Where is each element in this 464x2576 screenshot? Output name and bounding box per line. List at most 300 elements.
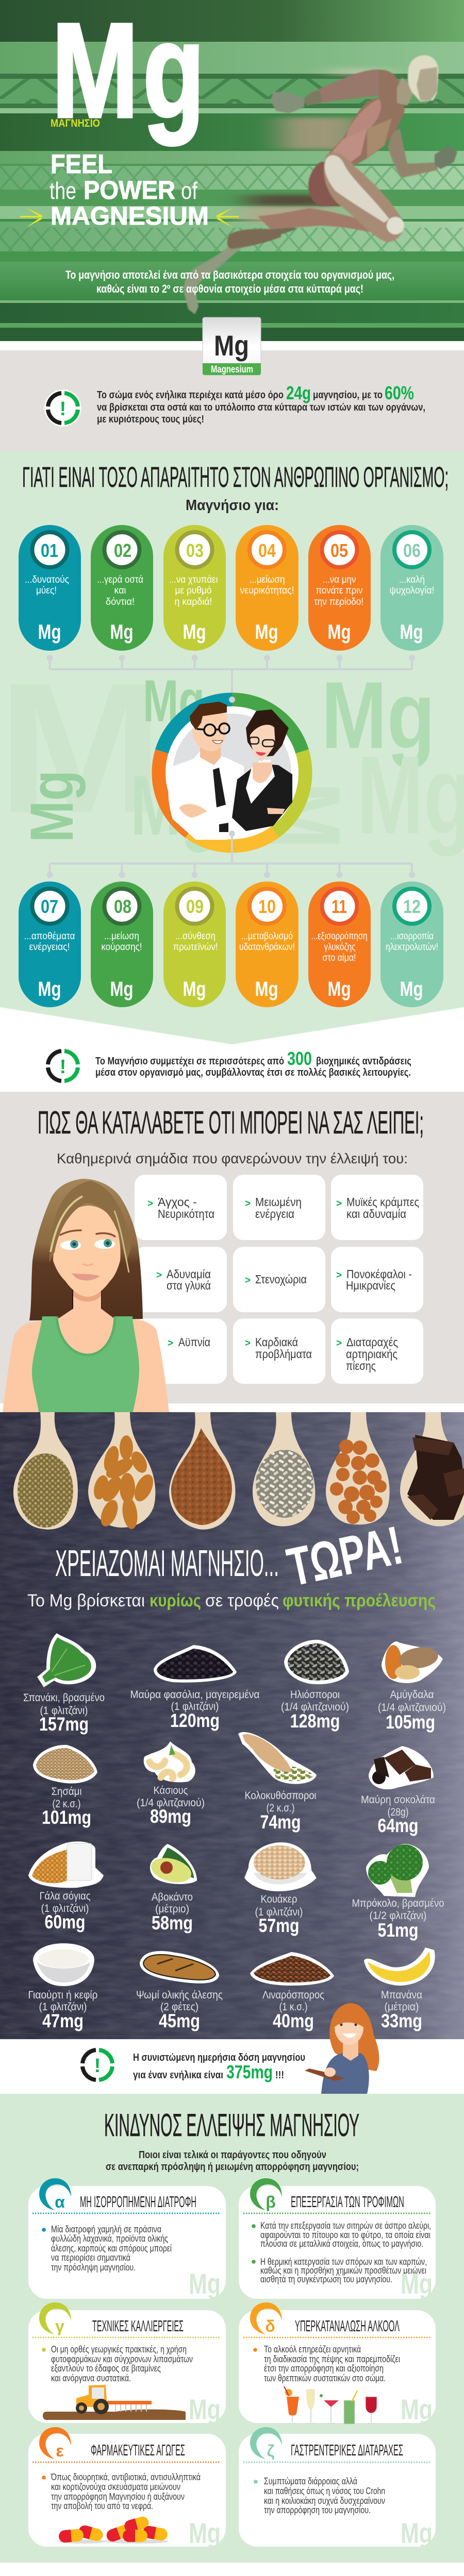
subheading: plant origin: Το Mg βρίσκεται: [27, 1591, 145, 1611]
card β: food processing: Mg: [401, 2267, 433, 2300]
food: cashews: [137, 1741, 205, 1827]
tank top: [32, 1316, 139, 1412]
food: yogurt: [28, 1943, 98, 2031]
illustration: worried woman: [3, 1179, 169, 1412]
food grid: [23, 1633, 446, 2031]
food: avocado: 58mg: [152, 1912, 193, 1934]
pill 07: ...αποθέματα: [24, 931, 75, 942]
card γ: farming techniques: [28, 2302, 226, 2426]
food: cashews: Κάσιους: [154, 1785, 188, 1797]
card ζ: gastrointestinal: και η κοιλιοκάκη συχνά δυσχεραίνουν: [264, 2495, 385, 2506]
background Mg watermarks: Mg: [0, 645, 286, 853]
mouth and nose: [71, 1273, 100, 1280]
pill 03: [163, 525, 226, 651]
pill 12: 12: [403, 896, 421, 917]
subheading: Καθημερινά σημάδια που φανερώνουν την έλλειψή του:: [57, 1150, 408, 1166]
food: banana: Μπανάνα: [381, 1989, 422, 2001]
pill 11: στο αίμα!: [323, 953, 356, 963]
card α: unbalanced diet: να περιορίσει σημαντικά: [51, 2252, 130, 2263]
food: sesame: Σησάμι: [52, 1786, 82, 1798]
food: pumpkin seeds with scoop: 74mg: [260, 1811, 301, 1833]
hero panel: [0, 0, 464, 341]
food: avocado: [148, 1844, 197, 1934]
pill 10: [236, 882, 299, 1007]
card: sweet cravings: >: [156, 1270, 162, 1281]
card: anxiety: [135, 1175, 227, 1240]
card: reduced energy: ενέργεια: [255, 1207, 294, 1221]
card: blood pressure: Διαταραχές: [346, 1335, 398, 1349]
card γ: farming techniques: φυτοφαρμάκων και σύγχρονων λιπασμάτων: [51, 2353, 193, 2364]
icon: cocktails: [284, 2386, 377, 2424]
alert text: [133, 2052, 305, 2082]
subheading: plant origin: σε τροφές: [205, 1591, 279, 1611]
pill 05: Mg: [328, 621, 351, 643]
brows: [60, 1230, 115, 1236]
spark rays: [20, 208, 239, 228]
alert: 24g in body: [44, 382, 425, 427]
magnesium caption: ΜΑΓΝΗΣΙΟ: [51, 117, 100, 129]
hero intro text: καθώς είναι το 2º σε αφθονία στοιχείο μέσα στα κύτταρά μας!: [96, 282, 363, 295]
food: oats bowl: [244, 1842, 317, 1936]
card γ: farming techniques: Mg: [189, 2393, 221, 2426]
pill 06: 06: [403, 540, 421, 561]
food: soy milk: (1 φλιτζάνι): [41, 1903, 89, 1914]
man shirt: [168, 751, 247, 840]
food: black beans: Μαύρα φασόλια, μαγειρεμένα: [130, 1689, 260, 1701]
card α: unbalanced diet: [28, 2178, 226, 2300]
Mg Magnesium badge: Mg: [214, 329, 249, 362]
card: heart problems: Καρδιακά: [255, 1335, 298, 1349]
pill 03: 03: [186, 540, 204, 561]
pill 02: Mg: [110, 621, 133, 643]
food: sesame: 101mg: [42, 1807, 91, 1828]
pill 12: [380, 882, 443, 1007]
pill 09: [163, 882, 226, 1007]
card: cramps: >: [336, 1198, 342, 1209]
pill 11: 11: [332, 896, 347, 917]
card: reduced energy: Μειωμένη: [255, 1195, 302, 1209]
pill 12: ηλεκτρολυτών!: [386, 942, 438, 953]
card: headaches: [331, 1247, 423, 1312]
hero background bands: [0, 0, 464, 341]
pill 05: ...να μην: [323, 574, 356, 585]
food: wholegrain bread: Ψωμί ολικής άλεσης: [136, 1989, 223, 2001]
food: cashews: (1/4 φλιτζανιού): [137, 1797, 205, 1809]
card: heart problems: >: [245, 1338, 251, 1349]
food: flaxseed: Λιναρόσπορος: [262, 1989, 324, 2001]
subheading: Ποιοι είναι τελικά οι παράγοντες που οδηγούν: [139, 2149, 326, 2161]
food: wholegrain bread: 45mg: [159, 2010, 200, 2031]
alert text: Η συνιστώμενη ημερήσια δόση μαγνησίου: [133, 2052, 305, 2063]
food: sunflower seeds: (1/4 φλιτζανιού): [281, 1701, 349, 1713]
pill 08: 08: [114, 896, 131, 917]
food: pumpkin seeds with scoop: (2 κ.σ.): [266, 1802, 295, 1814]
food: avocado: Αβοκάντο: [152, 1891, 193, 1903]
food: yogurt: 47mg: [42, 2010, 84, 2031]
connector lines top: [46, 655, 415, 700]
food: almonds: Αμύγδαλα: [390, 1689, 434, 1701]
spoon: sunflower kernels: [253, 1412, 315, 1527]
card ζ: gastrointestinal: την απορρόφηση του μαγνησίου.: [264, 2504, 371, 2515]
card ζ: gastrointestinal: και παθήσεις όπως η νόσος του Crohn: [264, 2485, 385, 2496]
card: sweet cravings: στα γλυκά: [167, 1279, 211, 1292]
background Mg watermarks: Mg: [18, 770, 86, 842]
alert text: 24g: [286, 382, 311, 403]
food: soy milk: [28, 1841, 104, 1933]
card: sweet cravings: [135, 1247, 227, 1312]
food: oats bowl: 57mg: [259, 1915, 299, 1936]
pill 04: Mg: [255, 621, 278, 643]
food: dark chocolate: [361, 1746, 435, 1836]
pill 02: δόντια!: [106, 597, 135, 607]
card α: unbalanced diet: Μία διατροφή χαμηλή σε πράσινα: [51, 2224, 161, 2234]
badge γ: [39, 2302, 71, 2335]
card: anxiety: Νευρικότητα: [158, 1207, 214, 1221]
card: blood pressure: αρτηριακής: [346, 1347, 397, 1361]
card: reduced energy: [233, 1175, 325, 1240]
spoon: almonds: [88, 1412, 157, 1530]
alert text: Το σώμα ενός ενήλικα περιέχει κατά μέσο όρο: [97, 389, 284, 401]
card ζ: gastrointestinal: [239, 2427, 436, 2549]
pill 03: ...να χτυπάει: [169, 574, 218, 585]
pill 11: [308, 882, 371, 1007]
top and bottom nodes: [229, 697, 235, 837]
background Mg watermarks: [0, 645, 464, 857]
pill 09: Mg: [183, 978, 206, 1001]
alert text: 300: [287, 1048, 312, 1069]
card: heart problems: [233, 1318, 325, 1384]
food: broccoli: (1/2 φλιτζάνι): [369, 1910, 427, 1922]
pill 05: την περίοδο!: [314, 597, 363, 607]
pill 10: ...μεταβολισμό: [241, 931, 293, 942]
pill 11: ...εξισορρόπηση: [311, 931, 367, 942]
card δ: alcohol: [239, 2302, 436, 2426]
pill 09: 09: [186, 896, 204, 917]
badge α: α: [55, 2193, 65, 2211]
badge ζ: [250, 2427, 282, 2460]
badge δ: [250, 2302, 282, 2335]
food: sunflower seeds: [281, 1640, 349, 1732]
card: sweet cravings: Αδυναμία: [167, 1267, 211, 1281]
pill 06: Mg: [400, 621, 423, 643]
badge β: β: [266, 2193, 276, 2211]
badge β: [250, 2178, 282, 2211]
background Mg watermarks: Mg: [321, 663, 435, 769]
food: pumpkin seeds with scoop: Κολοκυθόσποροι: [244, 1790, 317, 1802]
card: distress: [233, 1247, 325, 1312]
alert text: [97, 382, 425, 425]
pill 04: [236, 525, 299, 651]
card: insomnia: >: [168, 1338, 173, 1349]
card: insomnia: [135, 1318, 227, 1384]
icon: exclamation ring: [44, 1047, 81, 1084]
card: headaches: Πονοκέφαλοι -: [346, 1267, 412, 1281]
background Mg watermarks: Mg: [143, 668, 205, 734]
pill 09: ...σύνθεση: [175, 931, 216, 942]
pills row 2: [19, 882, 443, 1007]
pill 08: ...μείωση: [104, 931, 139, 942]
pill 05: 05: [330, 540, 348, 561]
pill 02: και: [114, 585, 126, 596]
card: heart problems: προβλήματα: [255, 1347, 312, 1361]
pill 10: υδατανθράκων!: [239, 942, 295, 953]
headline: of: [181, 177, 197, 204]
food: cashews: 89mg: [150, 1806, 191, 1827]
icon: exclamation ring: !: [60, 398, 66, 420]
food: spinach: [23, 1633, 105, 1735]
card: distress: Στενοχώρια: [255, 1273, 307, 1286]
card: blood pressure: >: [336, 1338, 342, 1349]
pill 08: κούρασης!: [101, 942, 142, 953]
food: banana: (μέτρια): [385, 2001, 419, 2013]
coloured ring: [159, 700, 305, 846]
central ring with couple: [159, 697, 305, 846]
food: black beans: 120mg: [170, 1710, 220, 1731]
icon: exclamation ring: !: [60, 1056, 66, 1078]
badge α: [39, 2178, 71, 2211]
pill 03: η καρδιά!: [174, 597, 212, 607]
pill 11: Mg: [328, 978, 351, 1001]
pill 03: Mg: [183, 621, 206, 643]
badge γ: γ: [55, 2317, 64, 2335]
food: oats bowl: (1 φλιτζάνι): [255, 1906, 303, 1918]
food: wholegrain bread: (2 φέτες): [160, 2001, 198, 2013]
card: headaches: Ημικρανίες: [346, 1279, 395, 1292]
food: pumpkin seeds with scoop: [238, 1732, 317, 1833]
pill 08: Mg: [110, 978, 133, 1001]
food: dark chocolate: (28g): [388, 1806, 408, 1818]
card α: unbalanced diet: άλεσης, καρπούς και σπόρους μπορεί: [51, 2243, 172, 2253]
pill 06: [380, 525, 443, 651]
card ε: medication: την απορρόφηση Μαγνησίου ή αυξάνουν: [51, 2491, 185, 2502]
woman jacket: [232, 764, 292, 831]
badge ζ: ζ: [267, 2442, 275, 2460]
subheading: σε ανεπαρκή πρόσληψη ή μειωμένη απορρόφηση μαγνησίου;: [106, 2161, 359, 2173]
pill 04: ...μείωση: [250, 574, 285, 585]
runner anatomy figure: [183, 55, 457, 314]
pill 01: Mg: [38, 621, 61, 643]
illustration: man and woman: [168, 702, 292, 840]
card: blood pressure: [331, 1318, 423, 1384]
food: flaxseed: [250, 1952, 334, 2031]
food section background: [0, 1412, 464, 2039]
pill 07: 07: [41, 896, 58, 917]
shoulders and arms: [3, 1285, 169, 1412]
card δ: alcohol: Το αλκοόλ επηρεάζει αρνητικά: [264, 2344, 361, 2354]
alert text: [95, 1048, 411, 1078]
food: almonds: 105mg: [386, 1711, 435, 1733]
card ε: medication: την αποβολή του από τα νεφρά.: [51, 2500, 153, 2511]
card: blood pressure: πίεσης: [346, 1359, 376, 1372]
food: spinach: 157mg: [39, 1714, 89, 1735]
alert text: μαγνησίου, με το: [313, 389, 383, 401]
food: black beans: (1 φλιτζάνι): [171, 1701, 219, 1713]
food: flaxseed: 40mg: [273, 2010, 314, 2031]
card γ: farming techniques: ΤΕΧΝΙΚΕΣ ΚΑΛΛΙΕΡΓΕΙΕΣ: [92, 2317, 184, 2335]
food: banana: [364, 1947, 435, 2031]
pill 11: γλυκόζης: [324, 942, 356, 953]
pill 05: [308, 525, 371, 651]
headline: POWER: [84, 176, 175, 205]
card α: unbalanced diet: Mg: [189, 2267, 221, 2300]
alert: 300 reactions: [44, 1047, 411, 1084]
pill 05: πονάτε πριν: [316, 585, 363, 596]
card ε: medication: [28, 2427, 226, 2549]
food: banana: 33mg: [381, 2010, 422, 2031]
woman hair: [246, 709, 289, 757]
alert text: με κυριότερους τους μύες!: [97, 414, 204, 425]
food: broccoli: Μπρόκολο, βρασμένο: [352, 1897, 444, 1909]
pill 12: ...ισορροπία: [390, 931, 434, 942]
card γ: farming techniques: εξαντλούν το έδαφος σε βιταμίνες: [51, 2363, 161, 2374]
spoon: chocolate: [400, 1412, 464, 1527]
alert text: βιοχημικές αντιδράσεις: [316, 1056, 411, 1067]
badge ε: [39, 2427, 71, 2460]
subheading: plant origin: φυτικής προέλευσης: [283, 1591, 436, 1611]
hero intro text: [65, 268, 394, 295]
food: sesame: (2 κ.σ.): [53, 1798, 80, 1810]
card δ: alcohol: Mg: [401, 2393, 433, 2426]
food: broccoli: 51mg: [377, 1920, 419, 1941]
eyes: [60, 1239, 115, 1250]
food: spinach: Σπανάκι, βρασμένο: [23, 1692, 105, 1704]
icon: capsules: [58, 2515, 169, 2544]
pill 08: [91, 882, 153, 1007]
card α: unbalanced diet: ΜΗ ΙΣΟΡΡΟΠΗΜΕΝΗ ΔΙΑΤΡΟΦΗ: [80, 2193, 196, 2211]
pill 09: πρωτεϊνών!: [173, 942, 218, 953]
pill 01: μύες!: [36, 585, 57, 596]
subheading: plant origin: [27, 1591, 436, 1611]
card ζ: gastrointestinal: Mg: [401, 2517, 433, 2549]
food: broccoli: [352, 1844, 444, 1941]
spoon: buckwheat: [13, 1412, 78, 1530]
pill 07: [19, 882, 81, 1007]
headline: MAGNESIUM: [51, 201, 209, 230]
card: insomnia: Αϋπνία: [178, 1335, 210, 1349]
spoon: hazelnuts: [326, 1412, 390, 1524]
alert: recommended daily dose: [79, 2046, 305, 2083]
pill 07: Mg: [38, 978, 61, 1001]
pill 02: ...γερά οστά: [97, 574, 143, 585]
card β: food processing: αισθητά τη συγκέντρωση του μαγνησίου.: [260, 2274, 392, 2284]
food: wholegrain bread: [136, 1951, 223, 2031]
illustration: woman with notebook: [305, 2003, 379, 2094]
pill 02: [91, 525, 153, 651]
wooden spoons with foods: [13, 1412, 464, 1530]
badge δ: δ: [265, 2317, 275, 2335]
card ε: medication: και κορτιζονούχα σκευάσματα μειώνουν: [51, 2481, 180, 2492]
heading: I need magnesium now: ΤΩΡΑ!: [282, 1515, 408, 1598]
card: cramps: και αδυναμία: [346, 1207, 406, 1221]
pill 07: ενέργειας!: [29, 942, 70, 953]
connector lines bottom: [46, 834, 415, 878]
food: soy milk: Γάλα σόγιας: [39, 1890, 91, 1902]
card β: food processing: [239, 2178, 436, 2300]
card α: unbalanced diet: την πρόσληψη μαγνησίου.: [51, 2262, 136, 2273]
pill 01: ...δυνατούς: [25, 574, 69, 585]
spoon: cocoa: [169, 1412, 236, 1530]
food: sesame: [33, 1745, 97, 1828]
card α: unbalanced diet: φυλλώδη λαχανικά, προϊόντα ολικής: [51, 2233, 168, 2244]
card δ: alcohol: έτσι την απορρόφηση και αξιοποίηση: [264, 2363, 384, 2374]
background Mg watermarks: Mg: [130, 758, 218, 853]
card ζ: gastrointestinal: Συμπτώματα διάρροιας αλλά: [264, 2476, 357, 2486]
heading: I need magnesium now: [55, 1515, 408, 1598]
pill 01: [19, 525, 81, 651]
card: cramps: Μυϊκές κράμπες: [346, 1195, 419, 1209]
icon: tractor: [43, 2385, 186, 2420]
card ε: medication: Όπως διουρητικά, αντιβιοτικά, αντισυλληπτικά: [51, 2471, 201, 2482]
card: cramps: [331, 1175, 423, 1240]
icon: exclamation ring: [79, 2046, 116, 2083]
card ε: medication: ΦΑΡΜΑΚΕΥΤΙΚΕΣ ΑΓΩΓΕΣ: [91, 2441, 185, 2459]
card ε: medication: Mg: [189, 2517, 221, 2549]
food: oats bowl: Κουάκερ: [261, 1893, 297, 1905]
alert text: Το Μαγνήσιο συμμετέχει σε περισσότερες από: [95, 1056, 284, 1067]
pill 04: νευρικότητας!: [240, 585, 294, 596]
Mg Magnesium badge: [203, 317, 261, 375]
symptom cards: [135, 1175, 423, 1384]
food: yogurt: Γιαούρτι ή κεφίρ: [28, 1989, 98, 2001]
risk cards: [28, 2178, 436, 2549]
food: soy milk: 60mg: [44, 1911, 86, 1933]
Mg Magnesium badge: Magnesium: [211, 364, 253, 375]
alert text: 60%: [385, 382, 414, 403]
food: almonds: (1/4 φλιτζανιού): [378, 1702, 446, 1714]
badge ε: ε: [56, 2442, 64, 2460]
alert text: !!!: [275, 2070, 284, 2081]
pill 03: με ρυθμό: [175, 585, 211, 596]
food: flaxseed: (1 κ.σ.): [279, 2001, 307, 2013]
background Mg watermarks: M: [246, 782, 361, 849]
food: yogurt: (1 φλιτζάνι): [39, 2001, 87, 2013]
pill 06: ψυχολογία!: [390, 585, 434, 596]
alert text: 375mg: [226, 2061, 273, 2082]
card γ: farming techniques: και ανόργανα συστατικά.: [51, 2372, 131, 2383]
headline: FEEL: [51, 149, 112, 179]
subheading: plant origin: κυρίως: [150, 1591, 201, 1611]
card: anxiety: Άγχος -: [158, 1195, 197, 1209]
headline: [49, 149, 209, 230]
pill 10: Mg: [255, 978, 278, 1001]
card: headaches: >: [336, 1270, 342, 1281]
food: sunflower seeds: Ηλιόσποροι: [290, 1689, 340, 1701]
pill 06: ...καλή: [399, 574, 425, 585]
card δ: alcohol: των θρεπτικών συστατικών στο σώμα.: [264, 2372, 386, 2383]
icon: exclamation ring: [44, 389, 81, 427]
hair back: [29, 1179, 143, 1320]
pill 10: 10: [258, 896, 276, 917]
card: anxiety: >: [147, 1198, 153, 1209]
alert text: για έναν ενήλικα είναι: [133, 2070, 223, 2081]
food: spinach: (1 φλιτζάνι): [40, 1705, 88, 1717]
food: sunflower seeds: 128mg: [290, 1710, 340, 1732]
pills row 1: [19, 525, 443, 651]
hair front highlights: [49, 1181, 131, 1262]
hero intro text: Το μαγνήσιο αποτελεί ένα από τα βασικότερα στοιχεία του οργανισμού μας,: [65, 268, 394, 281]
pill 02: 02: [114, 540, 131, 561]
card: distress: >: [245, 1275, 251, 1286]
card γ: farming techniques: Οι μη ορθές γεωργικές πρακτικές, η χρήση: [51, 2344, 187, 2354]
icon: exclamation ring: !: [94, 2055, 101, 2077]
pill 01: 01: [41, 540, 58, 561]
pill 12: Mg: [400, 978, 423, 1001]
food: dark chocolate: 64mg: [377, 1815, 419, 1836]
card δ: alcohol: τη διαδικασία της πέψης και παρεμποδίζει: [264, 2353, 400, 2364]
food: black beans: [130, 1645, 260, 1731]
pill 04: 04: [258, 540, 276, 561]
man hair: [190, 702, 227, 730]
